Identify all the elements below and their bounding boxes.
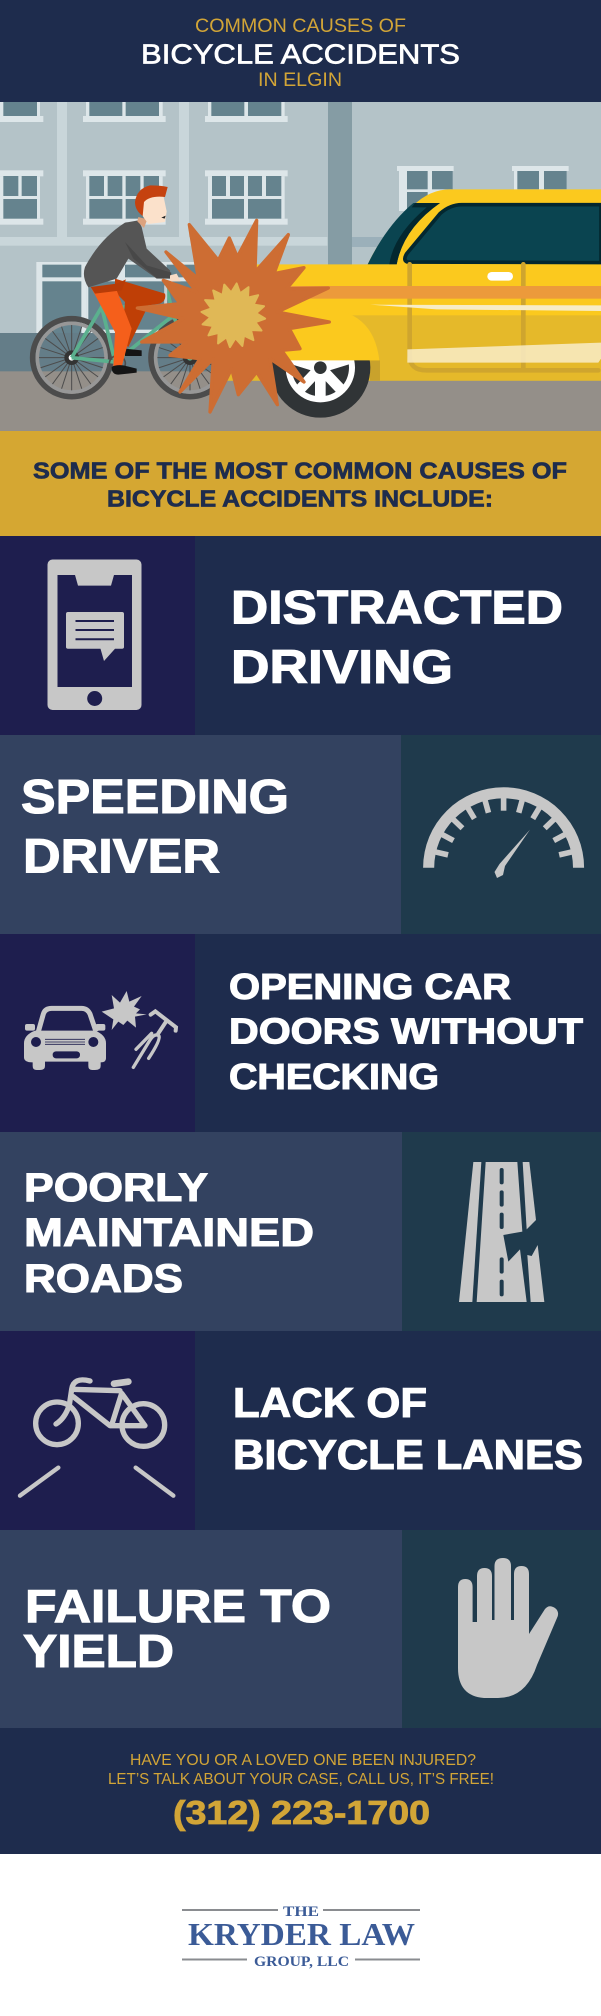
torso and arm [84,220,171,287]
logo: The Kryder Law Group: THE [283,1904,319,1920]
car [227,189,601,418]
bicycle frame [72,289,190,362]
bicycle wheels [26,312,236,403]
heading: speeding driver: SPEEDING [21,771,289,824]
head [137,217,147,228]
heading: opening car doors [229,966,583,1097]
heading: failure to yield [23,1580,331,1677]
far leg [115,279,165,347]
call to action text [108,1752,494,1788]
heading: poorly maintained roads: POORLY [24,1166,208,1210]
heading: speeding driver: DRIVER [23,830,220,884]
front wheel [270,318,370,418]
logo: The Kryder Law Group [182,1904,420,1970]
call to action text: LET’S TALK ABOUT YOUR CASE, CALL US, IT’S FREE! [108,1771,494,1788]
heading: poorly maintained roads: ROADS [24,1257,183,1301]
title: bicycle accidents: BICYCLE ACCIDENTS [141,38,460,70]
near leg [92,289,132,367]
panel: intro band [0,431,601,536]
heading: lack of bicycle lanes [233,1379,583,1478]
building wall [0,102,601,432]
heading: speeding driver [21,771,289,884]
intro text: SOME OF THE MOST COMMON CAUSES OF [33,458,567,484]
heading: opening car doors: OPENING CAR [229,966,511,1007]
icon: speedometer [423,787,584,878]
cyclist [26,185,236,403]
heading: distracted driving [231,582,563,694]
icon: damaged road [459,1162,544,1302]
road [0,371,601,432]
panel: call to action [0,1728,601,1854]
logo: The Kryder Law Group: KRYDER LAW [188,1916,415,1952]
intro text: BICYCLE ACCIDENTS INCLUDE: [107,486,493,512]
heading: failure to yield: YIELD [23,1625,174,1677]
panel: lack of bicycle lanes [0,1331,601,1530]
illustration: cyclist hit by car [0,102,601,432]
heading: lack of bicycle lanes: BICYCLE LANES [233,1431,583,1478]
panel: distracted driving [0,536,601,735]
heading: distracted driving: DRIVING [231,641,453,694]
windows [0,102,569,335]
call to action text: HAVE YOU OR A LOVED ONE BEEN INJURED? [130,1752,476,1769]
phone number: (312) 223-1700 [173,1794,430,1831]
heading: distracted driving: DISTRACTED [231,582,563,634]
icon: raised hand [458,1558,558,1698]
heading: poorly maintained roads: MAINTAINED [24,1211,314,1255]
icon: bicycle and lane lines [20,1380,173,1496]
panel: speeding driver [0,735,601,934]
heading: lack of bicycle lanes: LACK OF [233,1379,427,1426]
explosion [137,220,329,412]
panel: poorly maintained roads [0,1132,601,1331]
heading: poorly maintained roads [24,1166,314,1301]
icon: car door and bike collision [24,991,176,1070]
title: in Elgin: IN ELGIN [258,69,342,91]
logo: The Kryder Law Group: GROUP, LLC [254,1954,349,1970]
heading: opening car doors: DOORS WITHOUT [229,1010,583,1052]
heading: failure to yield: FAILURE TO [25,1580,331,1632]
intro text [33,458,567,512]
panel: header [0,0,601,102]
heading: opening car doors: CHECKING [229,1056,439,1097]
panel: opening car doors [0,934,601,1132]
explosion core [198,280,268,350]
panel: failure to yield [0,1530,601,1728]
icon: phone with message [48,560,142,710]
title: common causes of: COMMON CAUSES OF [195,16,406,37]
